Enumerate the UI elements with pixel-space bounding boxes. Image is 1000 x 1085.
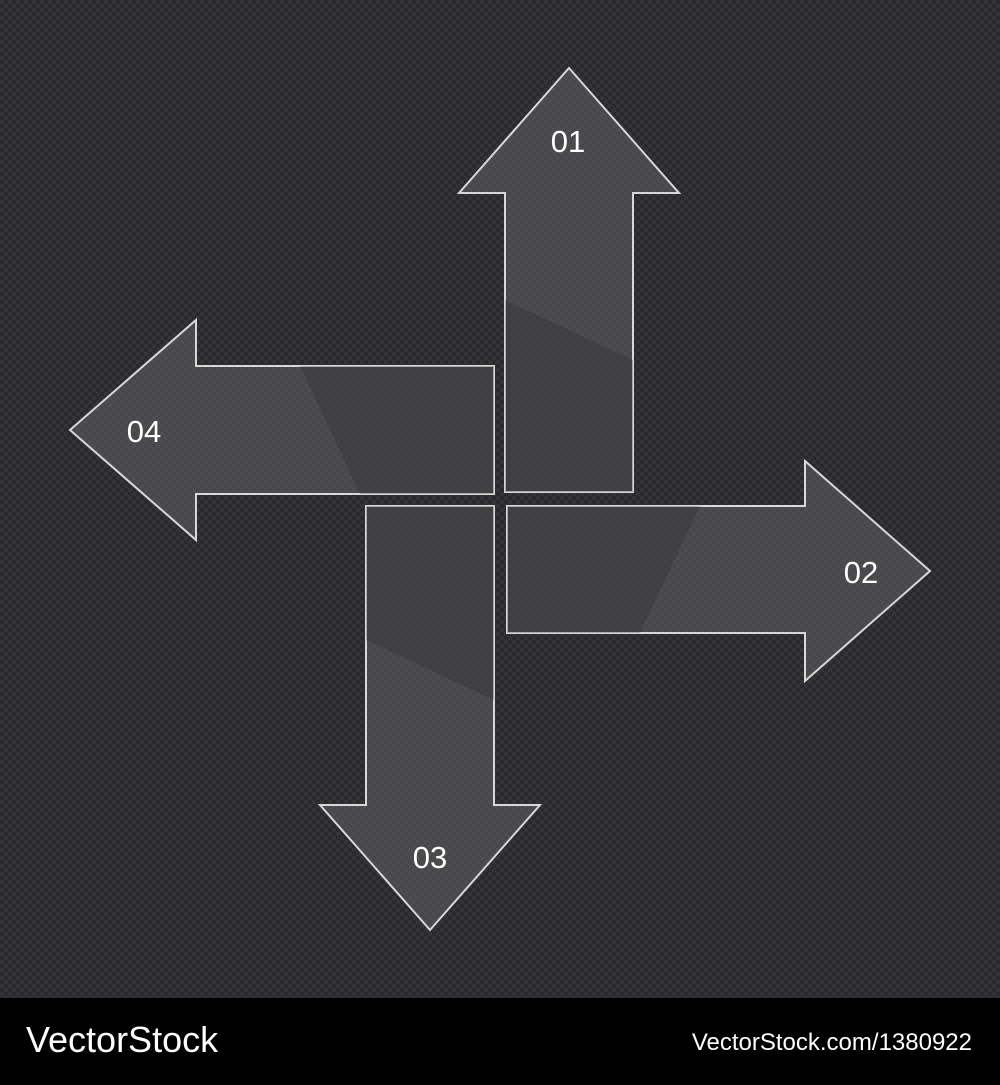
arrow 03 down [320,506,540,930]
footer url text: VectorStock.com/1380922 [692,1029,972,1056]
arrow 01 up [459,68,679,492]
footer logo text: VectorStock [26,1019,219,1060]
arrow 02 right [507,461,930,681]
label 04: 04 [127,414,161,449]
label 02: 02 [844,555,878,590]
arrow 04 left [70,320,494,540]
label 03: 03 [413,840,447,875]
footer bar [0,998,1000,1080]
label 01: 01 [551,124,585,159]
